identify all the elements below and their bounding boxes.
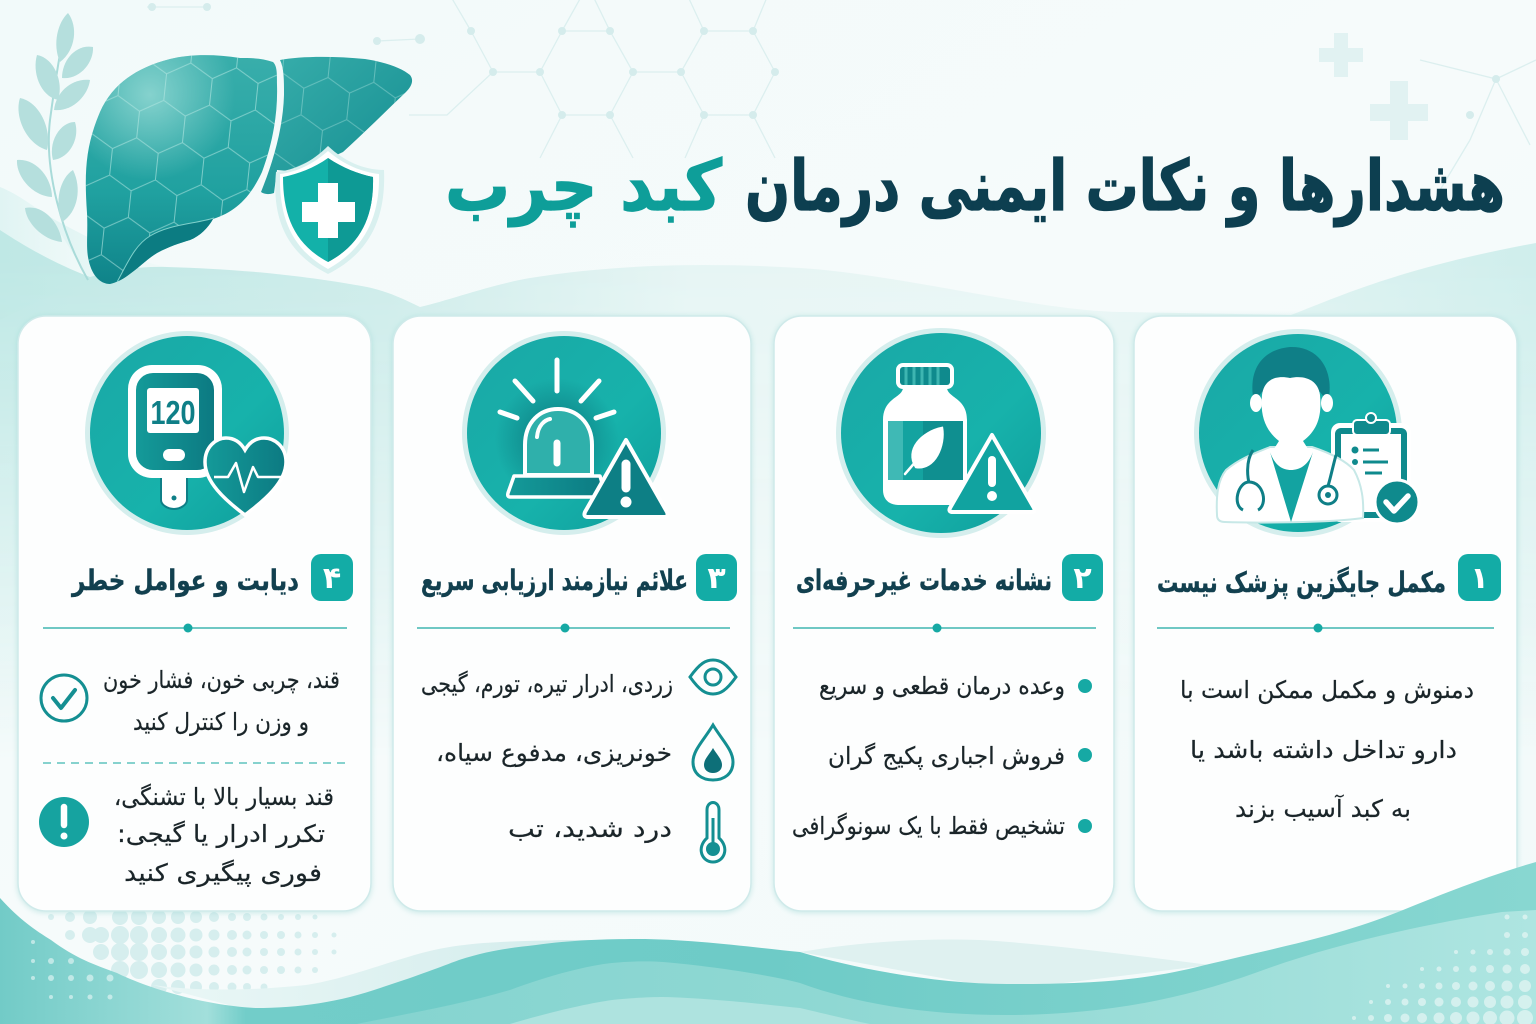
symptom row: thermometer: درد شدید، تب bbox=[508, 815, 672, 843]
bullet list: card 2: وعده درمان قطعی و سریع bbox=[819, 672, 1065, 700]
icon: doctor with clipboard bbox=[1194, 329, 1419, 537]
advice block: urgent warning bbox=[39, 783, 334, 887]
advice block: control: و وزن را کنترل کنید bbox=[133, 708, 309, 736]
advice block: control bbox=[41, 666, 340, 736]
panel: card 4 bbox=[18, 316, 371, 911]
bottom waves bbox=[0, 862, 1536, 1024]
advice block: urgent warning: قند بسیار بالا با تشنگی، bbox=[114, 783, 334, 811]
advice block: urgent warning: تکرر ادرار یا گیجی: bbox=[117, 820, 325, 848]
panel: card 1 bbox=[1134, 316, 1517, 911]
icon: alarm with warning bbox=[462, 331, 668, 535]
halftone dots on wave left bbox=[31, 940, 114, 1000]
halftone dots right bbox=[1352, 914, 1533, 1024]
title: کبد چرب bbox=[445, 145, 722, 228]
heading: card 3: علائم نیازمند ارزیابی سریع bbox=[421, 564, 688, 597]
body text: card 1: دمنوش و مکمل ممکن است با bbox=[1180, 676, 1474, 704]
body text: card 1: به کبد آسیب بزند bbox=[1235, 794, 1411, 823]
bullet list: card 2: تشخیص فقط با یک سونوگرافی bbox=[792, 812, 1065, 840]
body text: card 1 bbox=[1180, 676, 1474, 823]
badge: number 2: ۲ bbox=[1073, 561, 1092, 596]
heading: card 4: دیابت و عوامل خطر bbox=[70, 564, 299, 597]
symptom row: drop bbox=[436, 725, 733, 780]
symptom row: drop: خونریزی، مدفوع سیاه، bbox=[436, 739, 672, 767]
decorative leaf branch bbox=[17, 13, 93, 280]
bullet list: card 2 bbox=[792, 672, 1092, 840]
badge: number 1: ۱ bbox=[1470, 561, 1489, 596]
body text: card 1: دارو تداخل داشته باشد یا bbox=[1190, 736, 1457, 764]
symptom row: thermometer bbox=[508, 802, 725, 862]
heading: card 2: نشانه خدمات غیرحرفه‌ای bbox=[796, 564, 1052, 597]
icon: glucose meter with heart bbox=[85, 331, 289, 535]
bullet list: card 2: فروش اجباری پکیج گران bbox=[828, 742, 1065, 770]
badge: number 3: ۳ bbox=[707, 561, 726, 596]
title bbox=[445, 145, 1505, 228]
illustration: liver bbox=[80, 50, 420, 290]
symptom row: eye: زردی، ادرار تیره، تورم، گیجی bbox=[421, 670, 673, 698]
icon: glucose meter with heart: 120 bbox=[150, 394, 196, 431]
badge: number 2 bbox=[1062, 554, 1103, 601]
illustration: shield with cross bbox=[275, 146, 384, 274]
icon: supplement bottle with warning bbox=[836, 328, 1046, 538]
badge: number 3 bbox=[696, 554, 737, 601]
symptom row: eye bbox=[421, 660, 736, 698]
advice block: control: قند، چربی خون، فشار خون bbox=[103, 666, 340, 694]
heading: card 1: مکمل جایگزین پزشک نیست bbox=[1157, 566, 1446, 599]
advice block: urgent warning: فوری پیگیری کنید bbox=[124, 859, 322, 887]
badge: number 1 bbox=[1458, 554, 1501, 601]
panel: card 3 bbox=[393, 316, 751, 911]
badge: number 4: ۴ bbox=[323, 561, 341, 596]
badge: number 4 bbox=[311, 554, 353, 601]
halftone dots left bbox=[48, 909, 336, 995]
panel: card 2 bbox=[774, 316, 1114, 911]
